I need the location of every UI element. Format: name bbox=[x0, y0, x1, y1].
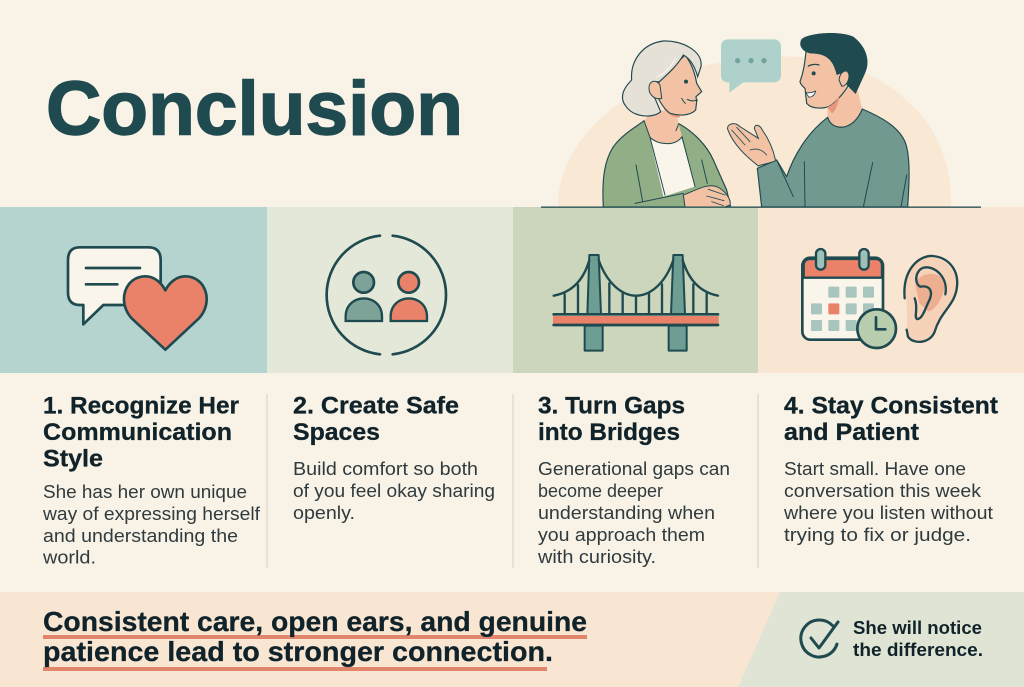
heading: 4. Stay Consistent bbox=[784, 392, 998, 420]
body text: world. bbox=[42, 548, 96, 568]
body text: with curiosity. bbox=[537, 547, 656, 567]
body text: and understanding the bbox=[43, 526, 238, 546]
column 3: turn gaps into bridges bbox=[537, 392, 730, 567]
side note: She will notice bbox=[853, 618, 982, 638]
body text bbox=[293, 459, 495, 523]
heading: 2. Create Safe bbox=[293, 392, 459, 420]
body text: of you feel okay sharing bbox=[293, 481, 495, 501]
body text: openly. bbox=[293, 503, 355, 523]
body text: trying to fix or judge. bbox=[784, 525, 971, 545]
heading: Spaces bbox=[293, 419, 380, 446]
heading: 3. Turn Gaps bbox=[538, 392, 685, 420]
background arch bbox=[558, 57, 951, 207]
heading bbox=[784, 392, 998, 446]
icon: bridge bbox=[553, 255, 719, 351]
speech bubble bbox=[721, 39, 781, 93]
man bbox=[728, 33, 909, 207]
heading bbox=[43, 392, 239, 472]
takeaway text: patience lead to stronger connection. bbox=[43, 636, 553, 667]
column 4: stay consistent and patient bbox=[783, 392, 998, 545]
body text bbox=[42, 482, 261, 568]
heading: Communication bbox=[43, 419, 232, 446]
icon: chat bubble and heart bbox=[68, 247, 207, 350]
body text: where you listen without bbox=[783, 503, 993, 523]
table line bbox=[541, 206, 981, 208]
heading bbox=[293, 392, 459, 446]
body text: She has her own unique bbox=[43, 482, 247, 502]
woman bbox=[603, 41, 731, 207]
column 2: create safe spaces bbox=[293, 392, 495, 523]
underlines bbox=[43, 635, 587, 671]
title: Conclusion bbox=[46, 66, 463, 152]
illustration: two people talking bbox=[558, 33, 951, 207]
heading: and Patient bbox=[784, 419, 919, 446]
takeaway text: Consistent care, open ears, and genuine bbox=[43, 606, 587, 637]
body text: become deeper bbox=[538, 481, 663, 501]
body text: conversation this week bbox=[784, 481, 982, 501]
body text: understanding when bbox=[538, 503, 715, 523]
icon: calendar, clock and ear bbox=[802, 249, 957, 348]
side note: the difference. bbox=[853, 640, 983, 660]
body text: Generational gaps can bbox=[538, 459, 730, 479]
icon: two people in a circle bbox=[327, 236, 446, 354]
body text bbox=[537, 459, 730, 567]
side note bbox=[853, 618, 983, 660]
panel: bottom takeaway strip bbox=[0, 592, 1024, 687]
column 1: recognize her communication style bbox=[42, 392, 261, 568]
heading: into Bridges bbox=[538, 419, 680, 446]
body text: you approach them bbox=[538, 525, 705, 545]
body text: Build comfort so both bbox=[293, 459, 478, 479]
panel: icon band bbox=[0, 207, 1024, 373]
body text: Start small. Have one bbox=[784, 459, 966, 479]
heading: Style bbox=[43, 446, 103, 472]
body text bbox=[783, 459, 993, 545]
takeaway text bbox=[43, 606, 587, 667]
body text: way of expressing herself bbox=[42, 504, 261, 524]
heading: 1. Recognize Her bbox=[43, 392, 239, 420]
heading bbox=[538, 392, 685, 446]
icon: check mark bbox=[801, 620, 838, 657]
